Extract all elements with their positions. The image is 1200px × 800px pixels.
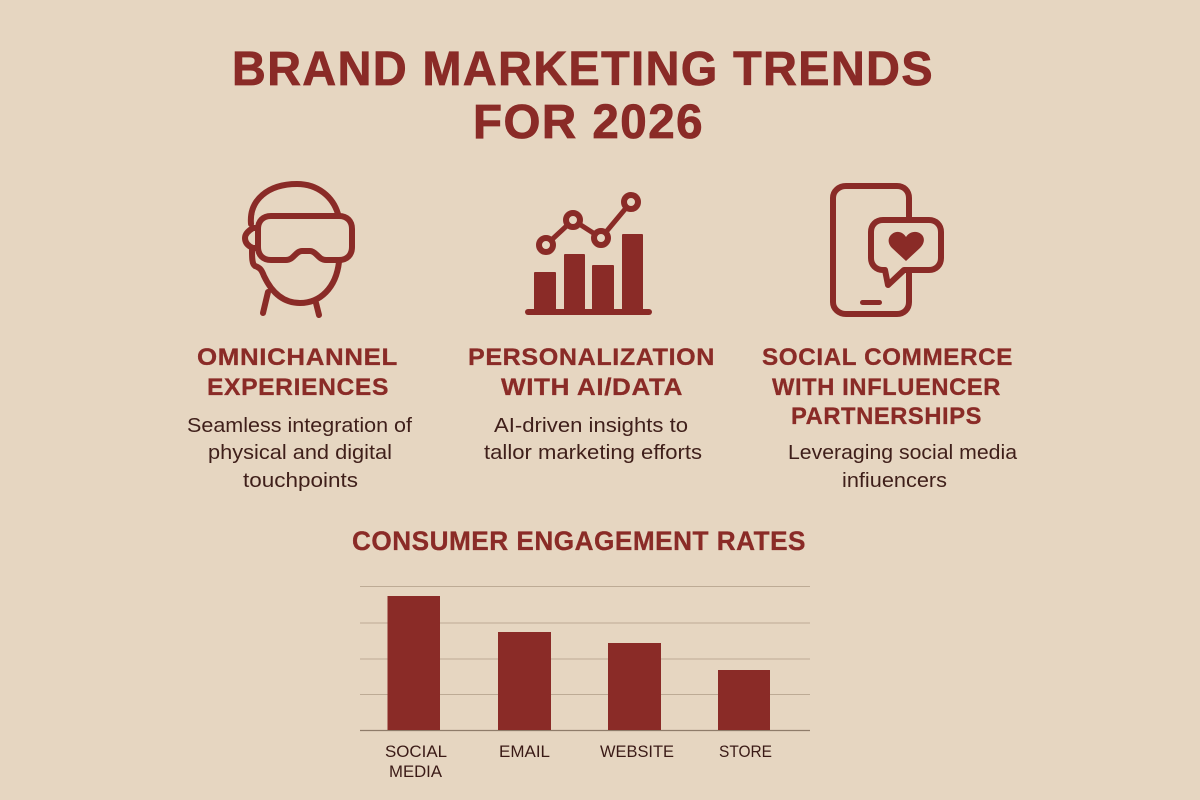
heading: omnichannel: EXPERIENCES xyxy=(207,374,389,401)
heading: social commerce: WITH INFLUENCER xyxy=(772,374,1001,401)
axis labels: STORE xyxy=(719,743,772,761)
heading: personalization xyxy=(468,344,715,401)
title: FOR 2026 xyxy=(473,96,704,149)
text: social commerce description: Leveraging social media xyxy=(788,441,1018,464)
bar: email xyxy=(498,632,551,730)
heading: personalization: PERSONALIZATION xyxy=(468,344,715,371)
bar chart: consumer engagement rates xyxy=(360,586,810,781)
text: social commerce description: infiuencers xyxy=(842,469,947,492)
axis labels: SOCIAL xyxy=(385,743,447,761)
heading: omnichannel xyxy=(197,344,398,401)
text: personalization description xyxy=(484,414,702,464)
text: omnichannel description: touchpoints xyxy=(243,469,358,492)
title xyxy=(232,43,934,149)
axis labels xyxy=(385,743,772,781)
text: social commerce description xyxy=(788,441,1018,492)
heading: social commerce xyxy=(762,344,1013,430)
axis labels: EMAIL xyxy=(499,743,550,761)
panel: personalization with AI/data xyxy=(468,195,715,464)
heading: social commerce: SOCIAL COMMERCE xyxy=(762,344,1013,371)
text: omnichannel description xyxy=(187,414,412,492)
icon: phone with heart speech bubble xyxy=(833,186,941,314)
heading: social commerce: PARTNERSHIPS xyxy=(791,403,982,430)
panel: omnichannel experiences xyxy=(187,184,412,492)
heading: consumer engagement rates: CONSUMER ENGAGEMENT RATES xyxy=(352,526,806,556)
panel: social commerce xyxy=(762,186,1018,492)
heading: omnichannel: OMNICHANNEL xyxy=(197,344,398,371)
text: personalization description: AI-driven insights to xyxy=(494,414,688,437)
text: omnichannel description: physical and digital xyxy=(208,441,392,464)
icon: bar chart with trend line xyxy=(525,195,652,315)
text: personalization description: tallor marketing efforts xyxy=(484,441,702,464)
bar: social media xyxy=(388,596,440,730)
axis labels: WEBSITE xyxy=(600,743,674,761)
title: BRAND MARKETING TRENDS xyxy=(232,43,934,96)
bar: store xyxy=(718,670,770,730)
text: omnichannel description: Seamless integration of xyxy=(187,414,412,437)
bar: website xyxy=(608,643,661,730)
icon: VR headset on head xyxy=(245,184,352,315)
heading: personalization: WITH AI/DATA xyxy=(501,374,683,401)
axis labels: MEDIA xyxy=(389,763,442,781)
